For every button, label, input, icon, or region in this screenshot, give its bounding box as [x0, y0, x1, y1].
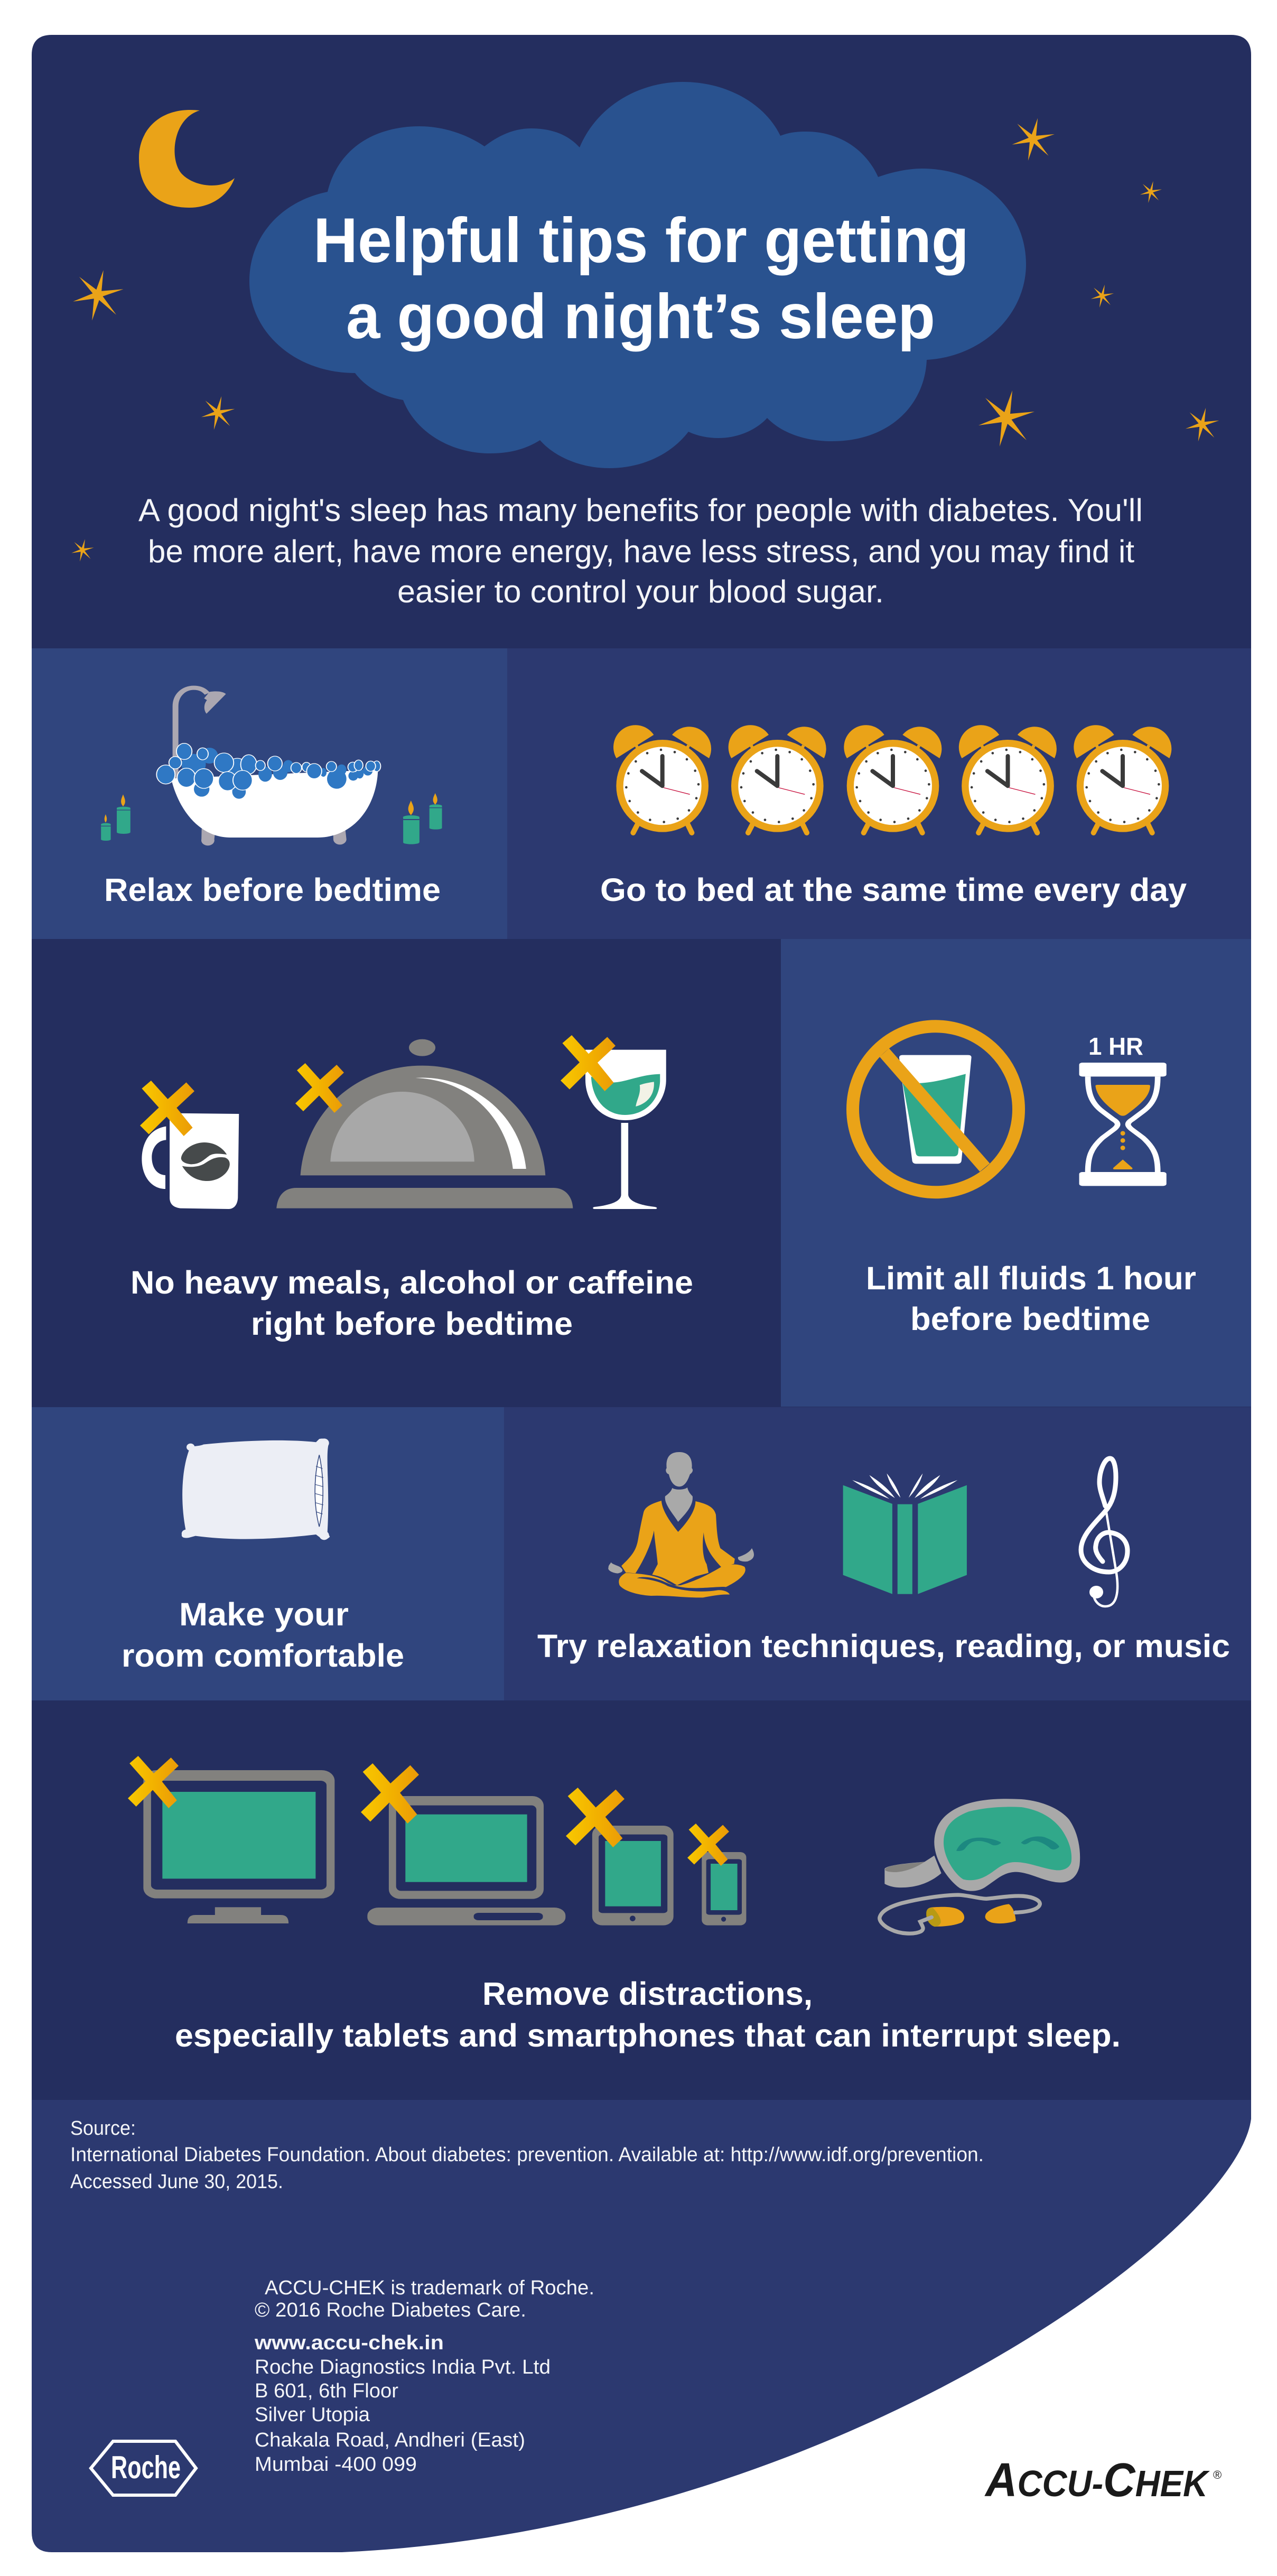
- logo: Accu-Chek: ®: [1213, 2468, 1222, 2481]
- panel: no heavy meals: [32, 939, 781, 1407]
- panel: remove distractions: [32, 1700, 1251, 2102]
- panel: same bedtime: [507, 648, 1251, 939]
- address text: www.accu-chek.in: [254, 2332, 444, 2354]
- icon: meal cloche: [276, 1039, 573, 1208]
- stars: [71, 118, 1219, 562]
- title: a good night’s sleep: [346, 281, 935, 352]
- intro text: easier to control your blood sugar.: [397, 574, 884, 609]
- icon: no drinking sign: [853, 1026, 1019, 1192]
- page background panel: [32, 35, 1251, 2103]
- trademark text: © 2016 Roche Diabetes Care.: [255, 2299, 526, 2321]
- trademark text: ACCU-CHEK is trademark of Roche.: [265, 2277, 594, 2299]
- heading: No heavy meals, alcohol or caffeine: [131, 1264, 693, 1300]
- heading: before bedtime: [910, 1301, 1150, 1337]
- panel: relaxation techniques: [504, 1407, 1251, 1700]
- heading: Limit all fluids 1 hour: [866, 1260, 1196, 1296]
- icon: monitor: [143, 1770, 334, 1923]
- intro text: be more alert, have more energy, have less stress, and you may find it: [148, 534, 1134, 569]
- icon: bathtub: [101, 688, 442, 845]
- icon: star: [1186, 408, 1219, 441]
- icon: hourglass: [1079, 1063, 1167, 1186]
- icon: star: [978, 390, 1034, 447]
- title: Helpful tips for getting: [313, 205, 969, 276]
- source text: International Diabetes Foundation. About diabetes: prevention. Available at: http://www.idf.org/prevention.: [70, 2144, 984, 2166]
- heading: [122, 1596, 404, 1673]
- intro text: [138, 492, 1143, 609]
- source text: [70, 2117, 984, 2193]
- heading: [131, 1264, 693, 1342]
- source text: Source:: [70, 2117, 136, 2140]
- icon: pillow: [182, 1438, 330, 1540]
- intro text: A good night's sleep has many benefits for people with diabetes. You'll: [138, 492, 1143, 528]
- icon: star: [1012, 118, 1055, 161]
- icon: alarm clocks: [613, 725, 1171, 833]
- panel: footer: [32, 2100, 1251, 2552]
- heading: Relax before bedtime: [104, 872, 441, 908]
- heading: Go to bed at the same time every day: [600, 872, 1187, 908]
- icon: star: [1091, 285, 1114, 308]
- address text: Chakala Road, Andheri (East): [255, 2429, 525, 2451]
- heading: Make your: [179, 1596, 349, 1632]
- label: 1 HR: 1 HR: [1088, 1033, 1143, 1060]
- heading: Remove distractions,: [482, 1976, 813, 2012]
- icon: star: [1140, 181, 1162, 203]
- icon: star: [201, 396, 235, 430]
- address text: [254, 2332, 551, 2476]
- panel: limit fluids: [781, 939, 1251, 1407]
- heading: Try relaxation techniques, reading, or music: [537, 1628, 1230, 1664]
- heading: room comfortable: [122, 1638, 404, 1673]
- title: [313, 205, 969, 352]
- icon: cross mark: [295, 1063, 344, 1113]
- source text: Accessed June 30, 2015.: [70, 2171, 283, 2193]
- icon: treble clef: [1081, 1458, 1127, 1606]
- icon: smartphone: [702, 1852, 746, 1926]
- icon: sleep mask and earplugs: [880, 1799, 1080, 1933]
- icon: candles: [101, 793, 442, 844]
- logo: Accu-Chek: ACCU-CHEK: [984, 2454, 1210, 2507]
- icon: meditating person: [608, 1452, 754, 1597]
- icon: cross mark: [361, 1763, 419, 1824]
- icon: cross mark: [128, 1756, 179, 1808]
- logo: Roche: [91, 2441, 196, 2495]
- address text: B 601, 6th Floor: [255, 2380, 398, 2402]
- icon: cross mark: [566, 1788, 624, 1847]
- address text: Roche Diagnostics India Pvt. Ltd: [255, 2356, 551, 2378]
- icon: cross mark: [140, 1081, 194, 1136]
- heading: [175, 1976, 1121, 2053]
- address text: Mumbai -400 099: [255, 2453, 417, 2476]
- icon: laptop: [367, 1796, 565, 1926]
- icon: tablet: [592, 1826, 674, 1926]
- trademark text: [255, 2277, 594, 2321]
- icon: cross mark: [561, 1035, 616, 1091]
- icon: coffee mug: [142, 1113, 239, 1209]
- icon: star: [73, 270, 124, 321]
- header section: [71, 82, 1219, 609]
- address text: Silver Utopia: [255, 2404, 370, 2426]
- icon: open book: [843, 1473, 967, 1594]
- logo: Roche: Roche: [111, 2450, 181, 2485]
- icon: wine glass: [585, 1050, 666, 1209]
- icon: cross mark: [687, 1824, 729, 1866]
- panel: comfortable room: [32, 1407, 504, 1700]
- heading: [866, 1260, 1196, 1337]
- icon: star: [71, 539, 94, 562]
- panel: relax before bedtime: [32, 648, 507, 939]
- heading: right before bedtime: [251, 1306, 573, 1342]
- icon: moon: [139, 110, 235, 208]
- cloud: [249, 82, 1026, 468]
- heading: especially tablets and smartphones that can interrupt sleep.: [175, 2017, 1121, 2053]
